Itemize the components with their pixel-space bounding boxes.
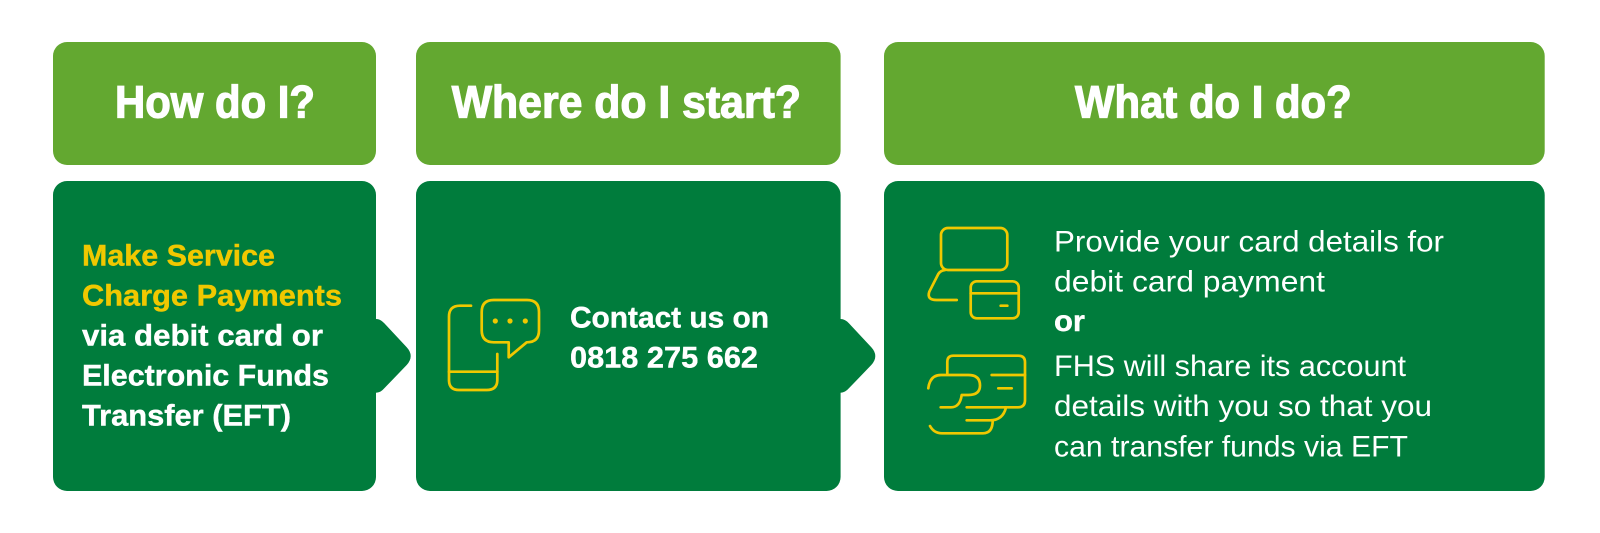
text: what to do: or <box>1054 305 1085 338</box>
heading: how do I: How do I? <box>115 76 315 127</box>
icon: phone with speech bubble <box>449 300 539 390</box>
text: what to do: details with you so that you <box>1054 390 1432 423</box>
text: make service charge payments <box>82 240 342 433</box>
text: what to do: Provide your card details for <box>1054 225 1444 258</box>
text: contact details <box>570 302 769 374</box>
text: what to do: can transfer funds via EFT <box>1054 431 1408 464</box>
heading box: where do I start <box>416 42 841 165</box>
text: make service charge payments: via debit card or <box>82 320 323 353</box>
heading: what do I do: What do I do? <box>1075 76 1352 127</box>
heading box: how do I <box>53 42 376 165</box>
text: make service charge payments: Charge Payments <box>82 280 342 313</box>
text: make service charge payments: Transfer (EFT) <box>82 400 291 433</box>
text: what to do: FHS will share its account <box>1054 350 1407 383</box>
text: make service charge payments: Make Service <box>82 240 275 273</box>
heading: where do I start: Where do I start? <box>452 76 801 127</box>
panel: how do I <box>53 42 411 491</box>
body box: what do I do <box>884 181 1545 491</box>
text: what to do <box>1054 225 1444 464</box>
text: contact details: 0818 275 662 <box>570 341 758 374</box>
body box with arrow: where do I start <box>416 181 875 491</box>
heading box: what do I do <box>884 42 1545 165</box>
icon: hand holding card <box>928 356 1025 433</box>
text: what to do: debit card payment <box>1054 265 1326 298</box>
panel: what do I do <box>884 42 1545 491</box>
text: make service charge payments: Electronic Funds <box>82 360 329 393</box>
body box with arrow: how do I <box>53 181 411 491</box>
panel: where do I start <box>416 42 875 491</box>
text: contact details: Contact us on <box>570 302 769 335</box>
icon: computer and debit card <box>929 228 1019 318</box>
